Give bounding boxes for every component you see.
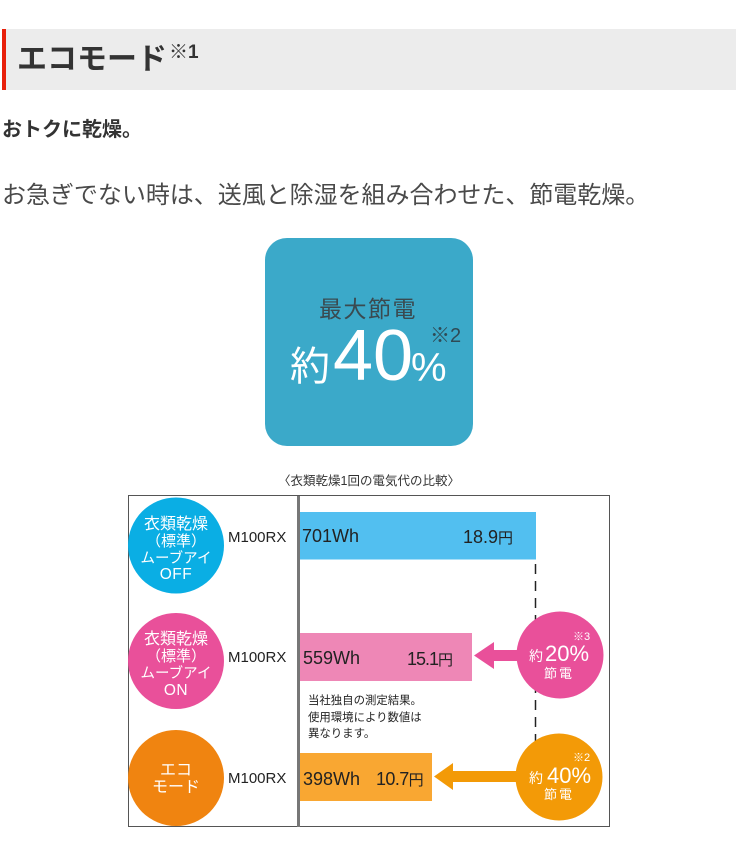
accent bar — [2, 29, 6, 90]
heading band: eco mode — [2, 29, 736, 90]
badge value — [290, 316, 447, 396]
row: standard move-eye off — [128, 498, 536, 594]
callout: about 40% saving: 約 — [529, 770, 543, 786]
row: standard move-eye off: 701Wh — [302, 526, 359, 546]
axis line — [297, 496, 300, 827]
arrow: orange — [434, 763, 520, 790]
badge value: 40 — [333, 316, 413, 396]
row: standard move-eye on: 15.1円 — [407, 649, 453, 669]
callout: about 20% saving: ※3 — [573, 631, 590, 643]
dashed reference line — [534, 564, 536, 745]
row: eco mode — [128, 730, 432, 826]
callout: about 20% saving: 約 — [529, 648, 543, 664]
heading text: エコモード※1 — [17, 42, 199, 76]
row: standard move-eye on: ON — [164, 682, 188, 699]
callout: about 40% saving: 節電 — [544, 787, 574, 802]
row: standard move-eye on: M100RX — [228, 649, 286, 666]
chart frame — [128, 496, 610, 826]
row: standard move-eye off: 18.9円 — [463, 527, 513, 547]
row: standard move-eye on: ムーブアイ — [141, 664, 211, 682]
measurement note: 当社独自の測定結果。 — [308, 693, 422, 707]
callout: about 20% saving — [516, 612, 604, 698]
row: standard move-eye off: OFF — [160, 566, 192, 583]
row: standard move-eye on: （標準） — [146, 648, 206, 665]
row: standard move-eye off: M100RX — [228, 529, 286, 546]
measurement note: 異なります。 — [308, 727, 375, 740]
row: eco mode: モード — [152, 779, 200, 796]
lead text: お急ぎでない時は、送風と除湿を組み合わせた、節電乾燥。 — [2, 182, 649, 209]
arrow: pink — [474, 642, 520, 669]
row: standard move-eye on — [128, 613, 472, 709]
row: eco mode: M100RX — [228, 770, 286, 787]
row: standard move-eye off: 衣類乾燥 — [144, 515, 208, 533]
callout: about 40% saving: 40% — [547, 763, 591, 788]
row: standard move-eye off: （標準） — [146, 533, 206, 550]
badge value: % — [411, 346, 447, 390]
callout: about 20% saving: 20% — [545, 641, 589, 666]
row: eco mode: 10.7円 — [376, 769, 424, 789]
row: eco mode: エコ — [160, 762, 192, 779]
measurement note: 使用環境により数値は — [308, 710, 422, 724]
measurement note — [308, 693, 422, 740]
callout: about 40% saving: ※2 — [573, 752, 590, 764]
callout: about 20% saving: 節電 — [544, 666, 574, 681]
callout: about 40% saving — [516, 734, 602, 820]
badge title: 最大節電 — [319, 296, 417, 322]
subheading: おトクに乾燥。 — [2, 119, 142, 141]
row: standard move-eye on: 衣類乾燥 — [144, 630, 208, 648]
badge: max 40% power saving — [265, 238, 473, 446]
row: standard move-eye on: 559Wh — [303, 648, 360, 668]
badge footnote mark: ※2 — [430, 325, 461, 347]
badge value: 約 — [290, 345, 330, 389]
row: standard move-eye off: ムーブアイ — [141, 549, 211, 567]
row: eco mode: 398Wh — [303, 769, 360, 789]
chart caption: 〈衣類乾燥1回の電気代の比較〉 — [278, 474, 460, 488]
